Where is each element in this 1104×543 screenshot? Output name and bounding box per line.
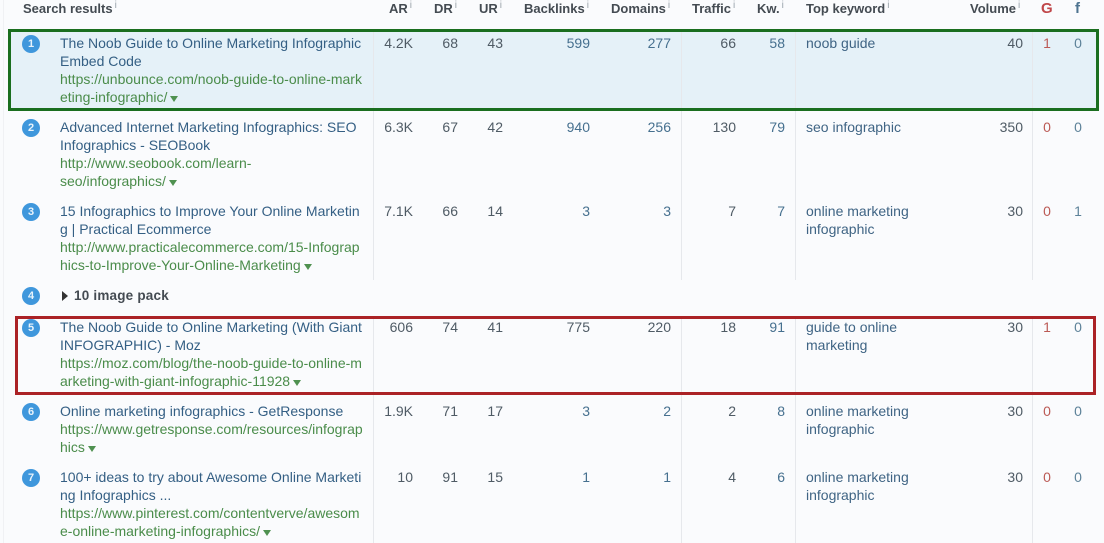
row 7: 0: [1074, 469, 1082, 485]
row 6: online marketing: [806, 403, 909, 419]
table header: Volumei: [970, 0, 1020, 16]
row 4: image pack: [22, 287, 169, 305]
row 5: 1: [1043, 319, 1051, 335]
row 3: 1: [1074, 203, 1082, 219]
row 3: 7: [777, 203, 785, 219]
row 1: 4.2K: [384, 35, 413, 51]
row 3: 3: [28, 206, 34, 218]
row 2: 350: [1000, 119, 1023, 135]
row 1: 599: [567, 35, 590, 51]
row 2: 0: [1074, 119, 1082, 135]
row 6: 2: [663, 403, 671, 419]
row 7: infographic: [806, 487, 874, 503]
row 2: Infographics - SEOBook: [60, 137, 210, 153]
row 7: 1: [663, 469, 671, 485]
row 7: 100+ ideas to try about Awesome Online Marketi: [60, 469, 361, 485]
row 5: 74: [442, 319, 458, 335]
row 5: guide to online: [806, 319, 897, 335]
row 2: 940: [567, 119, 590, 135]
row 2: 6.3K: [384, 119, 413, 135]
row 1: Embed Code: [60, 53, 142, 69]
row 3: 66: [442, 203, 458, 219]
row 1: 40: [1007, 35, 1023, 51]
row 5: https://moz.com/blog/the-noob-guide-to-online-m: [60, 355, 362, 371]
row 7: 6: [777, 469, 785, 485]
row 7: 0: [1043, 469, 1051, 485]
row 6: 8: [777, 403, 785, 419]
row 2: 130: [713, 119, 736, 135]
row 3: g | Practical Ecommerce: [60, 221, 211, 237]
row 1: 58: [769, 35, 785, 51]
row 1: 1: [28, 38, 34, 50]
row 3: 15 Infographics to Improve Your Online Marketin: [60, 203, 360, 219]
row 1: 277: [648, 35, 671, 51]
row 3: 3: [582, 203, 590, 219]
table header: Domainsi: [611, 0, 670, 16]
row 1: [22, 35, 1082, 105]
row 6: 0: [1074, 403, 1082, 419]
row 6: 1.9K: [384, 403, 413, 419]
row 6: [22, 403, 1082, 455]
column separators: [373, 29, 374, 280]
row 5: 91: [769, 319, 785, 335]
table header: f: [1075, 0, 1080, 17]
row 7: 7: [28, 472, 34, 484]
row 7: online marketing: [806, 469, 909, 485]
row 6: 17: [487, 403, 503, 419]
row 4: image pack: 4: [28, 290, 34, 302]
row 6: 3: [582, 403, 590, 419]
row 1: 0: [1074, 35, 1082, 51]
row 3: 3: [663, 203, 671, 219]
row 5: The Noob Guide to Online Marketing (With Giant: [60, 319, 362, 335]
row 2: 79: [769, 119, 785, 135]
row 6: 0: [1043, 403, 1051, 419]
row 6: Online marketing infographics - GetResponse: [60, 403, 343, 419]
row 2: Advanced Internet Marketing Infographics: SEO: [60, 119, 356, 135]
row 6: https://www.getresponse.com/resources/infograp: [60, 421, 363, 437]
row 5: 775: [567, 319, 590, 335]
table header: [23, 0, 1080, 17]
row 7: 15: [487, 469, 503, 485]
row 5: 5: [28, 322, 34, 334]
row 5: INFOGRAPHIC) - Moz: [60, 337, 201, 353]
row 5: 220: [648, 319, 671, 335]
row 6: 6: [28, 406, 34, 418]
table header: Kw.i: [757, 0, 784, 16]
row 3: hics-to-Improve-Your-Online-Marketing: [60, 257, 301, 273]
row 3: 7: [728, 203, 736, 219]
row 7: 4: [728, 469, 736, 485]
row 5: 41: [487, 319, 503, 335]
row 3: online marketing: [806, 203, 909, 219]
highlighted row background: [10, 30, 1097, 109]
table header: DRi: [434, 0, 457, 16]
table header: URi: [479, 0, 502, 16]
table header: Top keywordi: [806, 0, 889, 16]
row 2: 2: [28, 122, 34, 134]
row 7: ng Infographics ...: [60, 487, 171, 503]
row 2: 67: [442, 119, 458, 135]
row 3: [22, 203, 1082, 273]
row 1: 68: [442, 35, 458, 51]
row 2: 42: [487, 119, 503, 135]
row 4: image pack: 10 image pack: [74, 288, 169, 303]
table header: ARi: [389, 0, 412, 16]
row 5: 606: [390, 319, 413, 335]
row 5: arketing-with-giant-infographic-11928: [60, 373, 290, 389]
row 2: http://www.seobook.com/learn-: [60, 155, 251, 171]
row 1: https://unbounce.com/noob-guide-to-online-mark: [60, 71, 362, 87]
row 1: noob guide: [806, 35, 875, 51]
row 1: 66: [720, 35, 736, 51]
row 3: infographic: [806, 221, 874, 237]
row 2: 0: [1043, 119, 1051, 135]
row 5: marketing: [806, 337, 867, 353]
table header: Search resultsi: [23, 0, 117, 16]
row 7: 10: [397, 469, 413, 485]
row 5: 0: [1074, 319, 1082, 335]
row 3: http://www.practicalecommerce.com/15-Infograp: [60, 239, 360, 255]
row 3: 14: [487, 203, 503, 219]
row 7: [22, 469, 1082, 539]
row 6: hics: [60, 439, 85, 455]
row 7: 1: [582, 469, 590, 485]
row 5: [22, 319, 1082, 389]
row 2: 256: [648, 119, 671, 135]
row 2: seo/infographics/: [60, 173, 166, 189]
callout: red highlight box: [15, 316, 1096, 395]
row 1: The Noob Guide to Online Marketing Infographic: [60, 35, 361, 51]
callout: green highlight box: [8, 29, 1099, 111]
row 6: infographic: [806, 421, 874, 437]
row 7: 30: [1007, 469, 1023, 485]
row 6: 71: [442, 403, 458, 419]
row 5: 30: [1007, 319, 1023, 335]
row 3: 30: [1007, 203, 1023, 219]
row 1: 1: [1043, 35, 1051, 51]
row 7: https://www.pinterest.com/contentverve/awesom: [60, 505, 360, 521]
row 1: eting-infographic/: [60, 89, 167, 105]
row 6: 30: [1007, 403, 1023, 419]
row 2: seo infographic: [806, 119, 901, 135]
row 1: 43: [487, 35, 503, 51]
table header: Traffici: [692, 0, 735, 16]
row 2: [22, 119, 1082, 189]
row 5: 18: [720, 319, 736, 335]
table header: Backlinksi: [524, 0, 589, 16]
table header: G: [1041, 0, 1053, 17]
row 3: 7.1K: [384, 203, 413, 219]
row 7: 91: [442, 469, 458, 485]
row 3: 0: [1043, 203, 1051, 219]
row 7: e-online-marketing-infographics/: [60, 523, 260, 539]
row 6: 2: [728, 403, 736, 419]
